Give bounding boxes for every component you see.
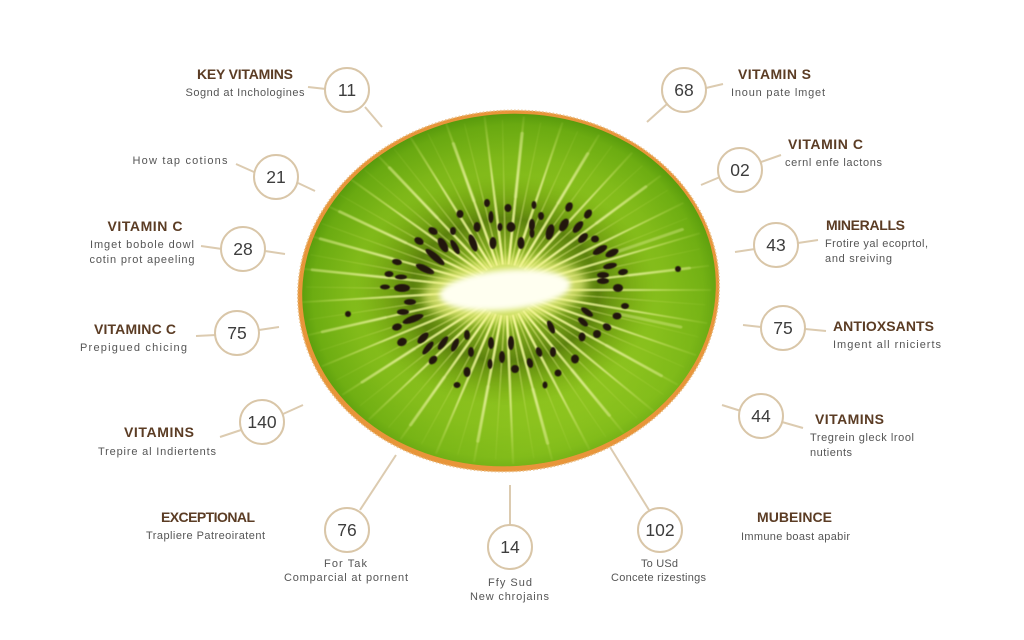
- callout: exceptional: [146, 509, 265, 542]
- callout: 102: Concete rizestings: [611, 572, 706, 584]
- kiwi flesh: [287, 97, 731, 483]
- callout: vitamins 44: Tregrein gleck lrool: [810, 432, 914, 444]
- callout: 14: Ffy Sud: [488, 577, 532, 589]
- callout: 76: For Tak: [324, 558, 368, 570]
- callout: vitamin s 68: 68: [674, 80, 694, 100]
- callout: vitamin c 02: 02: [730, 160, 750, 180]
- callout: minerals 43: 43: [766, 235, 786, 255]
- callout: vitamin c 28: [90, 218, 285, 271]
- callout: vitaminc c 75: [80, 311, 279, 355]
- callout: mubeince: [741, 509, 850, 543]
- callout: minerals 43: Frotire yal ecoprtol,: [825, 238, 928, 250]
- callout: 14: New chrojains: [470, 591, 550, 603]
- callout: vitaminc c 75: Prepigued chicing: [80, 342, 187, 354]
- callout: antioxsants 75: 75: [773, 318, 793, 338]
- radiating fibres: [301, 116, 711, 464]
- callout: vitamin s 68: Inoun pate lmget: [731, 87, 825, 99]
- callout: 14: [470, 485, 550, 603]
- callout: vitamin c 28: Imget bobole dowl: [90, 239, 194, 251]
- callout: mubeince: Immune boast apabir: [741, 531, 850, 543]
- callout: antioxsants 75: ANTIOXSANTS: [833, 318, 934, 334]
- callout: antioxsants 75: Imgent all rnicierts: [833, 339, 942, 351]
- callout: 102: To USd: [641, 558, 678, 570]
- callout: vitamin c 02: cernl enfe lactons: [785, 157, 882, 169]
- callout: 76: 76: [337, 520, 357, 540]
- callout: vitamins 44: [722, 394, 914, 459]
- callout: vitamin c 28: cotin prot apeeling: [90, 254, 194, 266]
- flesh shading: [287, 97, 731, 483]
- callout: vitaminc c 75: 75: [227, 323, 247, 343]
- callout: minerals 43: [735, 217, 928, 267]
- callout: vitaminc c 75: VITAMINC C: [94, 321, 176, 337]
- callout: vitamins 44: 44: [751, 406, 771, 426]
- callout: 21: 21: [266, 167, 286, 187]
- callout: exceptional: Trapliere Patreoiratent: [146, 530, 265, 542]
- callout: vitamin c 28: VITAMIN C: [108, 218, 182, 234]
- callout: vitamins 44: nutients: [810, 447, 852, 459]
- callout: 102: 102: [645, 520, 675, 540]
- callout: 102: [610, 447, 706, 584]
- callout: mubeince: MUBEINCE: [757, 509, 832, 525]
- callout: key vitamins 11: KEY VITAMINS: [197, 66, 293, 82]
- callout: 14: 14: [500, 537, 520, 557]
- callout: vitamins 140: 140: [247, 412, 277, 432]
- callout: vitamin s 68: VITAMIN S: [738, 66, 811, 82]
- callout: key vitamins 11: [186, 66, 382, 127]
- callout: vitamins 140: VITAMINS: [124, 424, 194, 440]
- callout: minerals 43: and sreiving: [825, 253, 892, 265]
- callout: vitamin c 28: 28: [233, 239, 253, 259]
- callout: vitamins 140: [98, 400, 303, 458]
- callout: 21: [132, 155, 315, 199]
- callout: vitamins 140: Trepire al Indiertents: [98, 446, 216, 458]
- callout: exceptional: EXCEPTIONAL: [161, 509, 255, 525]
- callout: vitamins 44: VITAMINS: [815, 411, 884, 427]
- callout: 76: [284, 455, 408, 584]
- kiwi core glow: [421, 252, 589, 328]
- callout: vitamin c 02: VITAMIN C: [788, 136, 863, 152]
- callout: 21: How tap cotions: [132, 155, 228, 167]
- kiwi skin: [283, 93, 734, 489]
- callout: antioxsants 75: [743, 306, 942, 351]
- callout: key vitamins 11: Sognd at Inchologines: [186, 87, 305, 99]
- callout: minerals 43: MINERALLS: [826, 217, 905, 233]
- callout: vitamin c 02: [701, 136, 882, 192]
- callout: 76: Comparcial at pornent: [284, 572, 408, 584]
- kiwi slice: [297, 110, 720, 472]
- callout: key vitamins 11: 11: [338, 80, 356, 100]
- kiwi seeds: [345, 199, 681, 388]
- callout: vitamin s 68: [647, 66, 825, 122]
